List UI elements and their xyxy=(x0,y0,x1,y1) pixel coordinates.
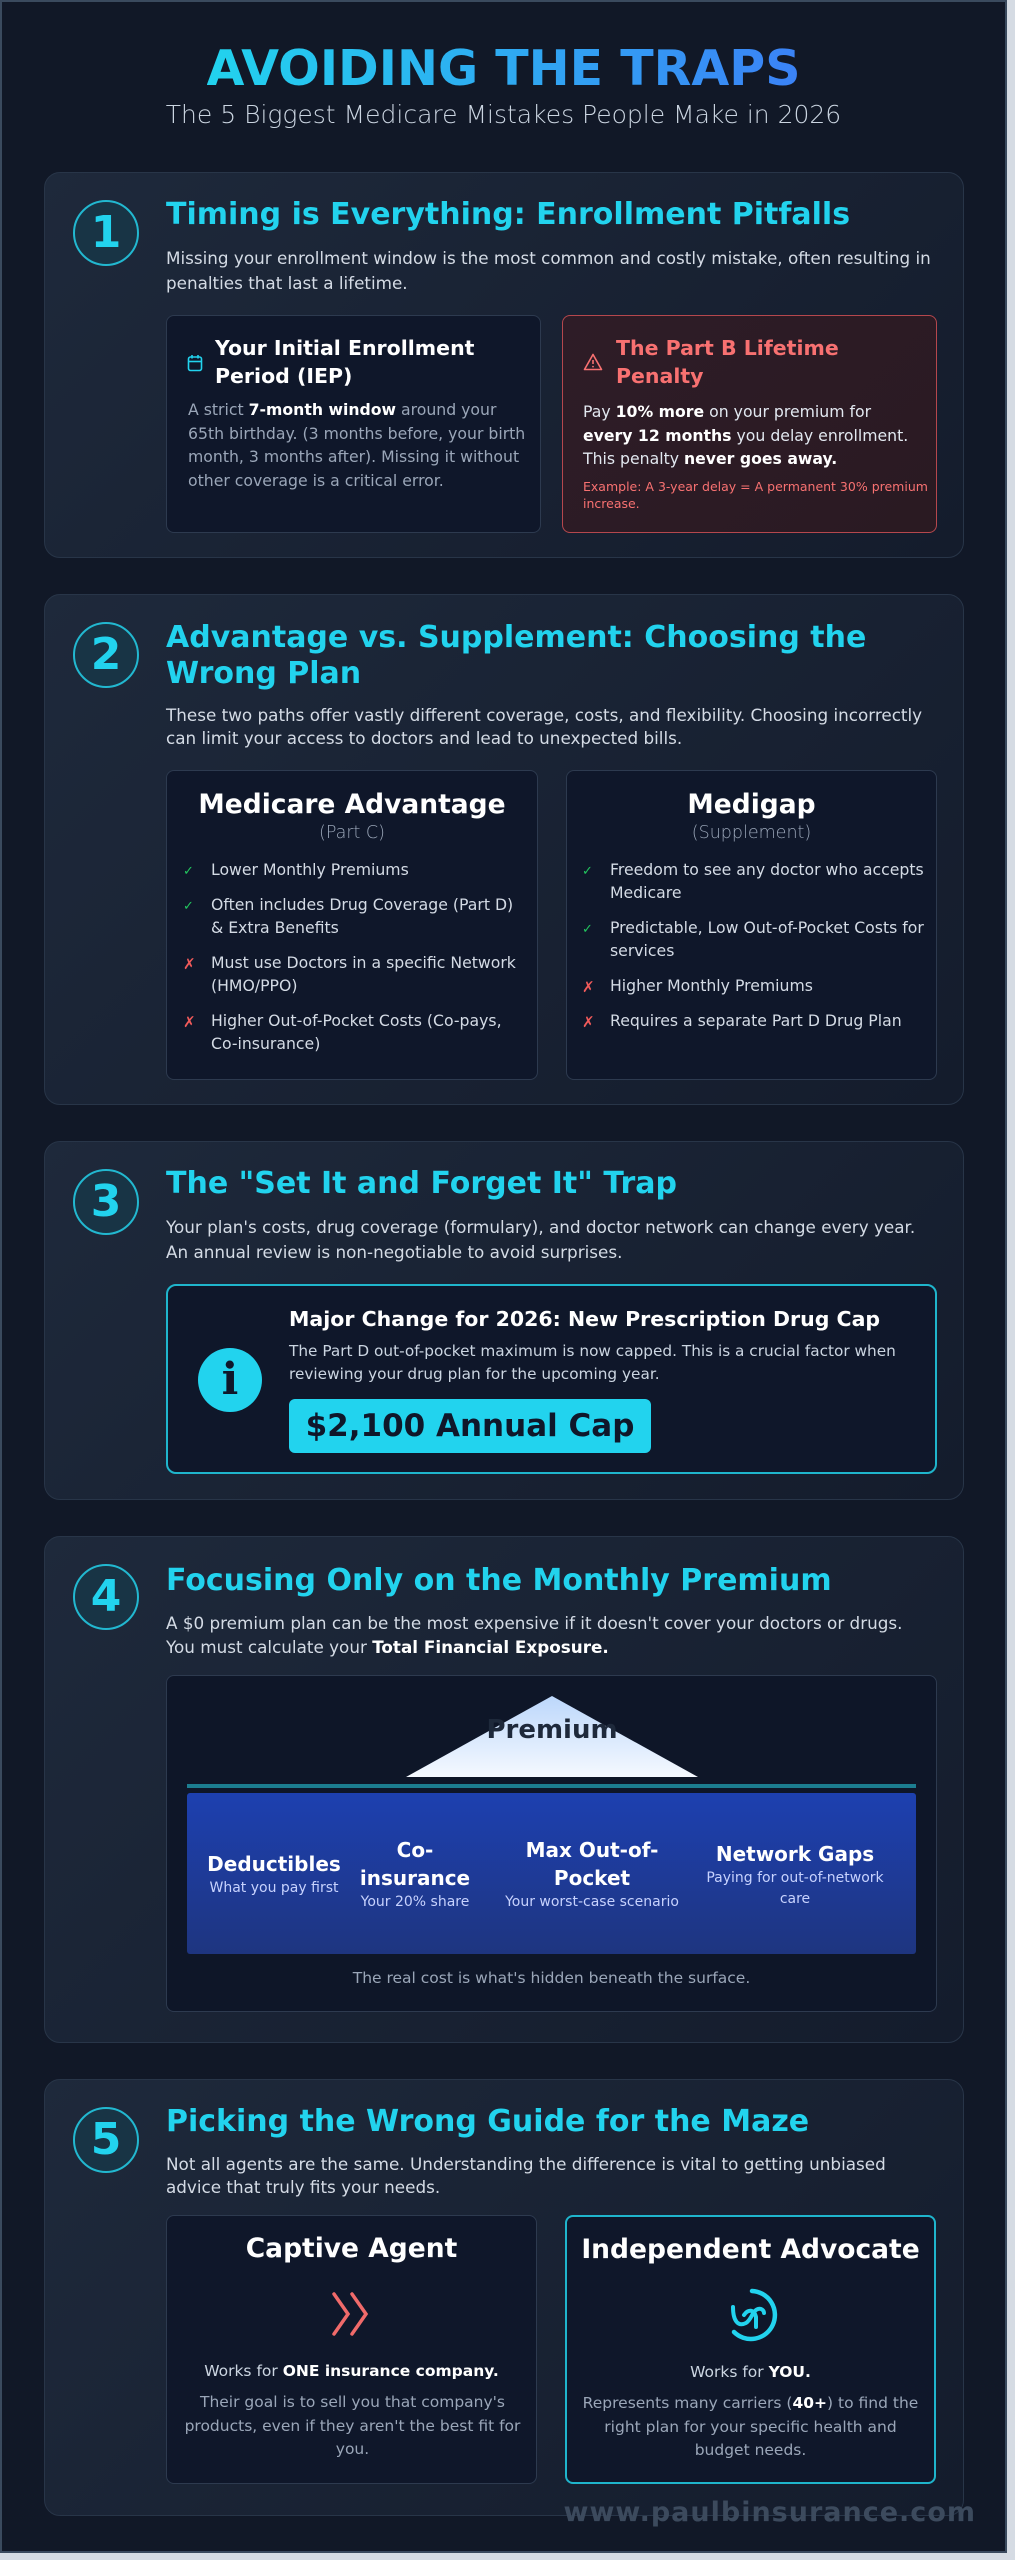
icon: calendar xyxy=(188,355,202,372)
triangle: premium xyxy=(406,1696,698,1777)
desc: Represents many carriers (40+) to find the right plan for your specific health and budget needs. xyxy=(583,2394,918,2459)
card title: Penalty xyxy=(616,364,704,388)
card subtitle: (Part C) xyxy=(319,823,385,843)
description 4 xyxy=(166,1613,902,1657)
item: co-insurance: insurance xyxy=(360,1866,470,1890)
badge: $2,100 cap xyxy=(289,1399,651,1453)
item: network gaps: Network Gaps xyxy=(716,1842,874,1866)
footer: website: www.paulbinsurance.com xyxy=(564,2497,976,2528)
pros/cons list: Freedom to see any doctor who accepts Medicare xyxy=(610,860,924,902)
number badge 4: 4 xyxy=(91,1571,121,1622)
card: Medigap: ✗ xyxy=(582,1013,595,1031)
waterline xyxy=(187,1784,916,1788)
pros/cons list xyxy=(183,860,516,1053)
number badge 2 xyxy=(73,622,139,688)
pros/cons list: Requires a separate Part D Drug Plan xyxy=(610,1011,902,1030)
heading 3: The "Set It and Forget It" Trap xyxy=(166,1166,677,1201)
description 2: These two paths offer vastly different coverage, costs, and flexibility. Choosing incorrectly can limit your access to doctors and lead to unexpected bills. xyxy=(166,705,922,748)
card title: Captive Agent xyxy=(246,2233,457,2264)
item: max out-of-pocket: Pocket xyxy=(554,1866,630,1890)
pros/cons list: Lower Monthly Premiums xyxy=(211,860,409,879)
card: independent advocate xyxy=(565,2215,936,2484)
pros/cons list: Predictable, Low Out-of-Pocket Costs for services xyxy=(610,918,924,960)
card title: The Part B Lifetime xyxy=(616,336,839,360)
card: Medicare Advantage: ✓ xyxy=(183,899,194,914)
label: premium: Premium xyxy=(486,1715,618,1745)
number badge 1: 1 xyxy=(91,207,121,258)
subtitle: The 5 Biggest Medicare Mistakes People Make in 2026 xyxy=(166,100,841,129)
card: Medigap: ✗ xyxy=(582,978,595,996)
card: Medicare Advantage xyxy=(166,770,538,1080)
number badge 5 xyxy=(73,2107,139,2173)
panel: 5 wrong guide xyxy=(44,2079,964,2516)
icon: warning xyxy=(584,354,602,370)
card: Medigap: ✓ xyxy=(582,864,593,879)
caption: The real cost is what's hidden beneath the surface. xyxy=(353,1969,750,1987)
icon: advocate logo xyxy=(731,2288,778,2342)
item: co-insurance: Your 20% share xyxy=(361,1894,469,1910)
callout: drug cap xyxy=(166,1284,937,1474)
card: captive agent xyxy=(166,2215,537,2484)
card: Medigap: ✓ xyxy=(582,922,593,937)
card: Part B penalty xyxy=(562,315,937,533)
callout body: The Part D out-of-pocket maximum is now capped. This is a crucial factor when reviewing your drug plan for the upcoming year. xyxy=(289,1342,896,1383)
panel: 2 advantage vs supplement xyxy=(44,594,964,1105)
description 3: Your plan's costs, drug coverage (formulary), and doctor network can change every year. An annual review is non-negotiable to avoid surprises. xyxy=(166,1217,915,1262)
number badge 2: 2 xyxy=(91,629,121,680)
card body: A strict 7-month window around your 65th birthday. (3 months before, your birth month, 3 months after). Missing it without other coverage is a critical error. xyxy=(188,400,525,490)
icon: info: i xyxy=(222,1354,238,1405)
heading 2 xyxy=(166,620,866,691)
card subtitle: (Supplement) xyxy=(692,823,811,843)
heading 1: Timing is Everything: Enrollment Pitfalls xyxy=(166,197,850,232)
number badge 4 xyxy=(73,1564,139,1630)
description 4: You must calculate your Total Financial Exposure. xyxy=(166,1637,609,1657)
description 1: Missing your enrollment window is the most common and costly mistake, often resulting in penalties that last a lifetime. xyxy=(166,248,931,293)
example note: Example: A 3-year delay = A permanent 30% premium increase. xyxy=(583,479,928,511)
heading 2: Wrong Plan xyxy=(166,656,361,691)
card title: Medicare Advantage xyxy=(198,789,506,820)
card: IEP xyxy=(166,315,541,533)
item: max out-of-pocket xyxy=(505,1838,679,1910)
pros/cons list: Higher Out-of-Pocket Costs (Co-pays, Co-insurance) xyxy=(211,1011,502,1053)
pros/cons list: Higher Monthly Premiums xyxy=(610,976,813,995)
item: network gaps xyxy=(706,1842,884,1907)
item: max out-of-pocket: Max Out-of- xyxy=(526,1838,658,1862)
card title xyxy=(616,336,839,388)
works for: Works for YOU. xyxy=(690,2363,811,2381)
number badge 1 xyxy=(73,200,139,266)
underwater block xyxy=(187,1793,916,1954)
icon: info xyxy=(198,1348,262,1412)
card: Medigap xyxy=(566,770,937,1080)
pros/cons list: Often includes Drug Coverage (Part D) & Extra Benefits xyxy=(211,895,513,937)
icon: chevrons xyxy=(332,2292,368,2336)
panel: 3 set it and forget it xyxy=(44,1141,964,1500)
number badge 3: 3 xyxy=(91,1176,121,1227)
heading 4: Focusing Only on the Monthly Premium xyxy=(166,1563,832,1598)
card title: Your Initial Enrollment xyxy=(215,336,474,360)
description 4: A $0 premium plan can be the most expensive if it doesn't cover your doctors or drugs. xyxy=(166,1613,902,1633)
card title: Medigap xyxy=(687,789,816,820)
item: deductibles: Deductibles xyxy=(207,1852,341,1876)
panel: 4 monthly premium xyxy=(44,1536,964,2043)
item: network gaps: Paying for out-of-network xyxy=(706,1870,884,1886)
pros/cons list xyxy=(582,860,924,1031)
works for: Works for ONE insurance company. xyxy=(204,2362,499,2380)
number badge 5: 5 xyxy=(91,2114,121,2165)
item: deductibles xyxy=(207,1852,341,1896)
item: co-insurance: Co- xyxy=(397,1838,433,1862)
card: Medicare Advantage: ✗ xyxy=(183,1013,196,1031)
pros/cons list: Must use Doctors in a specific Network (HMO/PPO) xyxy=(211,953,516,995)
card title: Independent Advocate xyxy=(581,2234,920,2265)
card title: Period (IEP) xyxy=(215,364,352,388)
heading 2: Advantage vs. Supplement: Choosing the xyxy=(166,620,866,655)
iceberg chart xyxy=(166,1675,937,2012)
item: co-insurance xyxy=(360,1838,470,1910)
card: Medicare Advantage: ✓ xyxy=(183,864,194,879)
card: Medicare Advantage: ✗ xyxy=(183,955,196,973)
callout title: Major Change for 2026: New Prescription Drug Cap xyxy=(289,1307,880,1331)
item: network gaps: care xyxy=(780,1891,810,1907)
heading 5: Picking the Wrong Guide for the Maze xyxy=(166,2104,809,2139)
badge: $2,100 cap: $2,100 Annual Cap xyxy=(306,1408,634,1444)
item: deductibles: What you pay first xyxy=(210,1880,338,1896)
item: max out-of-pocket: Your worst-case scenario xyxy=(505,1894,679,1910)
card title xyxy=(214,336,474,388)
panel: 1 timing xyxy=(44,172,964,558)
card body: Pay 10% more on your premium for every 12 months you delay enrollment. This penalty never goes away. xyxy=(583,402,908,468)
title: AVOIDING THE TRAPS xyxy=(206,40,800,97)
desc: Their goal is to sell you that company's products, even if they aren't the best fit for you. xyxy=(185,2393,520,2458)
number badge 3 xyxy=(73,1169,139,1235)
description 5: Not all agents are the same. Understanding the difference is vital to getting unbiased advice that truly fits your needs. xyxy=(166,2154,886,2197)
